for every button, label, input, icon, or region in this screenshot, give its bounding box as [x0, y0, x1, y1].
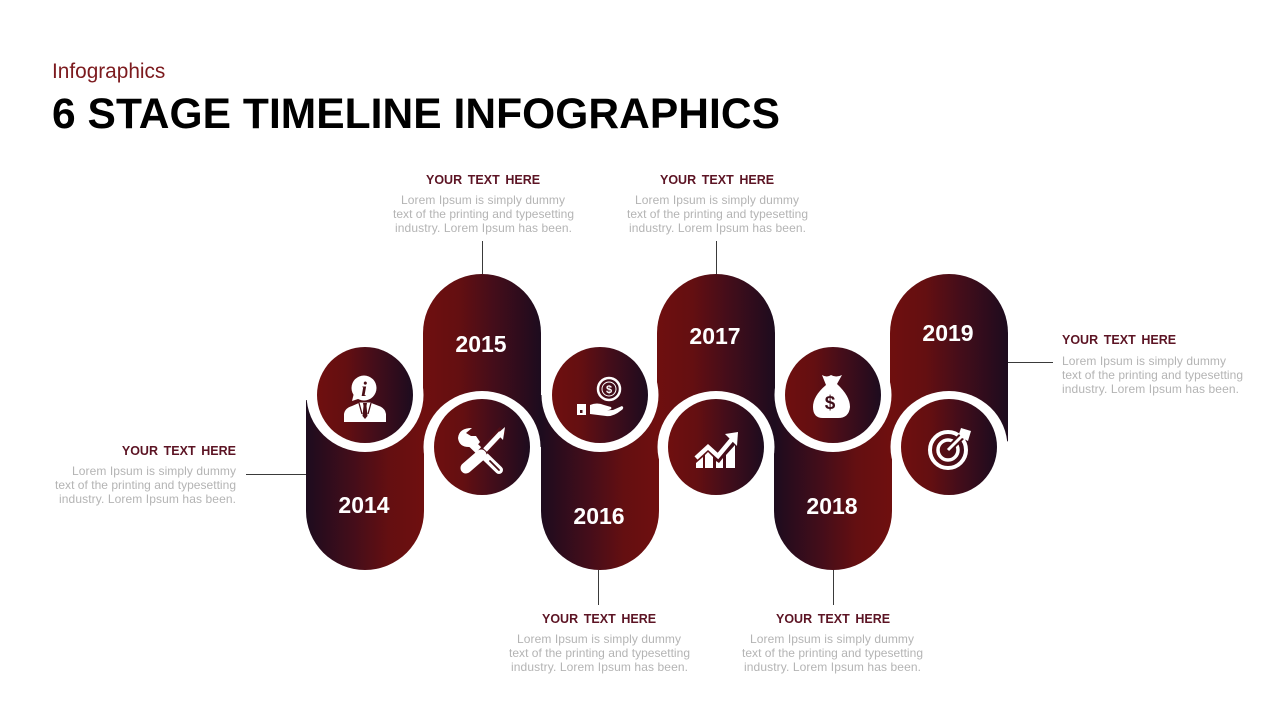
text block: 2017	[627, 173, 808, 235]
icon: hand holding coin: $	[606, 384, 612, 396]
text block: 2016	[509, 612, 690, 674]
icon: hand holding coin	[552, 347, 648, 443]
icon: target with arrow	[901, 399, 997, 495]
text block: 2018	[742, 612, 923, 674]
segment 2016	[541, 395, 659, 570]
text block: 2018: industry. Lorem Ipsum has been.	[744, 660, 921, 674]
text block: 2015: industry. Lorem Ipsum has been.	[395, 221, 572, 235]
segment 2018	[774, 395, 892, 570]
text block: 2015: YOUR TEXT HERE	[426, 173, 540, 187]
text block: 2018: Lorem Ipsum is simply dummy	[750, 632, 914, 646]
segment 2017	[657, 274, 775, 447]
text block: 2019: text of the printing and typesetting	[1062, 368, 1243, 382]
icon: person with info bubble	[317, 347, 413, 443]
text block: 2015: Lorem Ipsum is simply dummy	[401, 193, 565, 207]
text block: 2015: text of the printing and typesetting	[393, 207, 574, 221]
segment 2015	[423, 274, 541, 447]
segment 2019	[890, 274, 1008, 447]
text block: 2016: YOUR TEXT HERE	[542, 612, 656, 626]
icon: money bag: $	[825, 393, 836, 414]
text block: 2019: industry. Lorem Ipsum has been.	[1062, 382, 1239, 396]
year 2017: 2017	[689, 323, 741, 349]
text block: 2016: text of the printing and typesetting	[509, 646, 690, 660]
text block: 2016: Lorem Ipsum is simply dummy	[517, 632, 681, 646]
segment 2014	[306, 400, 424, 570]
text block: 2014: YOUR TEXT HERE	[122, 444, 236, 458]
text block: 2014: Lorem Ipsum is simply dummy	[72, 464, 236, 478]
year 2015: 2015	[455, 331, 507, 357]
icon: wrench and screwdriver	[434, 399, 530, 495]
text block: 2014: text of the printing and typesetting	[55, 478, 236, 492]
text block: 2017: text of the printing and typesetting	[627, 207, 808, 221]
text block: 2019	[1062, 333, 1243, 396]
title: 6 STAGE TIMELINE INFOGRAPHICS	[52, 91, 780, 138]
wave ribbon	[306, 274, 1008, 570]
text block: 2014	[55, 444, 236, 506]
year 2018: 2018	[806, 493, 858, 519]
text block: 2016: industry. Lorem Ipsum has been.	[511, 660, 688, 674]
subtitle: Infographics	[52, 60, 165, 83]
icon: growth chart	[668, 399, 764, 495]
year 2014: 2014	[338, 492, 390, 518]
text block: 2019: YOUR TEXT HERE	[1062, 333, 1176, 347]
year 2016: 2016	[573, 503, 625, 529]
text block: 2017: Lorem Ipsum is simply dummy	[635, 193, 799, 207]
text block: 2017: YOUR TEXT HERE	[660, 173, 774, 187]
icon: money bag	[785, 347, 881, 443]
connector lines	[246, 241, 1053, 605]
text block: 2015	[393, 173, 574, 235]
icon: person with info bubble: i	[361, 377, 367, 401]
text block: 2017: industry. Lorem Ipsum has been.	[629, 221, 806, 235]
white rings	[306, 338, 1008, 503]
year 2019: 2019	[922, 320, 974, 346]
text block: 2018: text of the printing and typesetting	[742, 646, 923, 660]
text block: 2019: Lorem Ipsum is simply dummy	[1062, 354, 1226, 368]
text block: 2014: industry. Lorem Ipsum has been.	[59, 492, 236, 506]
text block: 2018: YOUR TEXT HERE	[776, 612, 890, 626]
